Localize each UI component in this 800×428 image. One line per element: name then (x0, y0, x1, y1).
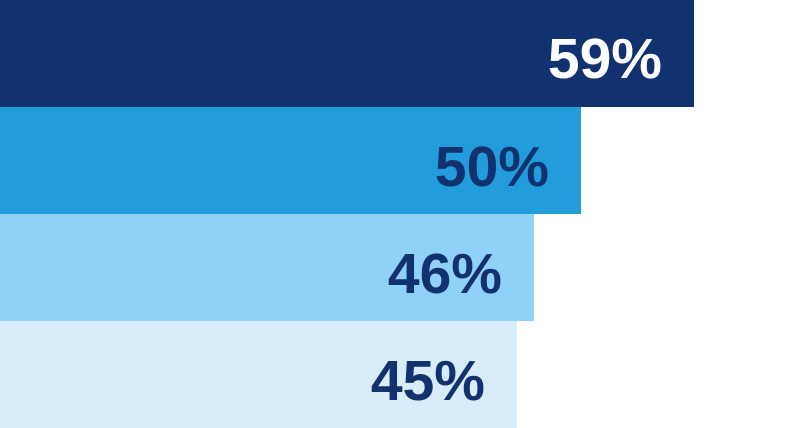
value: 59%: 59% (548, 27, 662, 91)
bar: 46% (0, 214, 534, 321)
value: 45%: 45% (371, 349, 485, 413)
bar: 45% (0, 321, 517, 428)
value: 46%: 46% (388, 242, 502, 306)
bar: 50% (0, 107, 581, 214)
value: 50%: 50% (435, 135, 549, 199)
bar: 59% (0, 0, 694, 107)
